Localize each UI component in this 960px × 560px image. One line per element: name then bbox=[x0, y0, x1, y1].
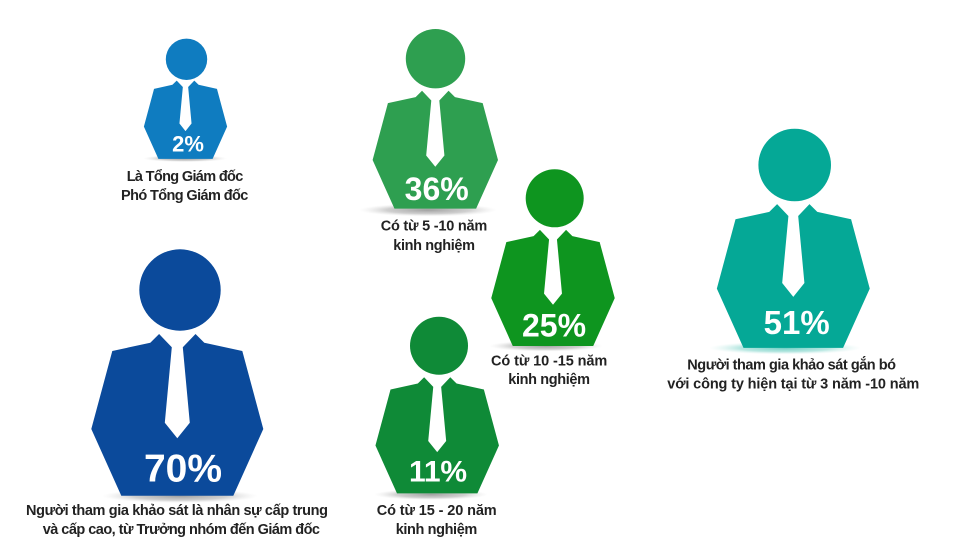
value: 70%: 70% bbox=[144, 448, 222, 491]
person: 25% 10-15 years bbox=[489, 169, 615, 388]
value: 25%: 25% bbox=[522, 308, 586, 344]
label: 2%: Là Tổng Giám đốc bbox=[127, 169, 243, 185]
label: 11%: Có từ 15 - 20 năm bbox=[377, 503, 497, 519]
person: 51% tenure bbox=[667, 129, 919, 392]
label: 70%: Người tham gia khảo sát là nhân sự cấp trung bbox=[26, 503, 328, 519]
person: 36% 5-10 years bbox=[359, 29, 498, 254]
label line 2: 70%: và cấp cao, từ Trưởng nhóm đến Giám đốc bbox=[43, 522, 320, 538]
label: 25%: Có từ 10 -15 năm bbox=[491, 353, 607, 369]
value: 51%: 51% bbox=[764, 304, 830, 341]
person: 11% 15-20 years bbox=[374, 317, 499, 538]
label line 2: 25%: kinh nghiệm bbox=[508, 372, 590, 388]
label line 2: 36%: kinh nghiệm bbox=[393, 238, 475, 254]
person: 70% mid and senior staff bbox=[26, 249, 328, 538]
value: 36%: 36% bbox=[405, 171, 469, 207]
label line 2: 2%: Phó Tổng Giám đốc bbox=[121, 188, 248, 204]
person: 2% executives bbox=[121, 39, 248, 204]
label: 36%: Có từ 5 -10 năm bbox=[381, 219, 487, 235]
label: 51%: Người tham gia khảo sát gắn bó bbox=[687, 355, 896, 373]
label line 2: 51%: với công ty hiện tại từ 3 năm -10 năm bbox=[667, 376, 919, 392]
value: 11%: 11% bbox=[409, 456, 467, 489]
label line 2: 11%: kinh nghiệm bbox=[396, 522, 477, 538]
value: 2%: 2% bbox=[172, 132, 204, 157]
